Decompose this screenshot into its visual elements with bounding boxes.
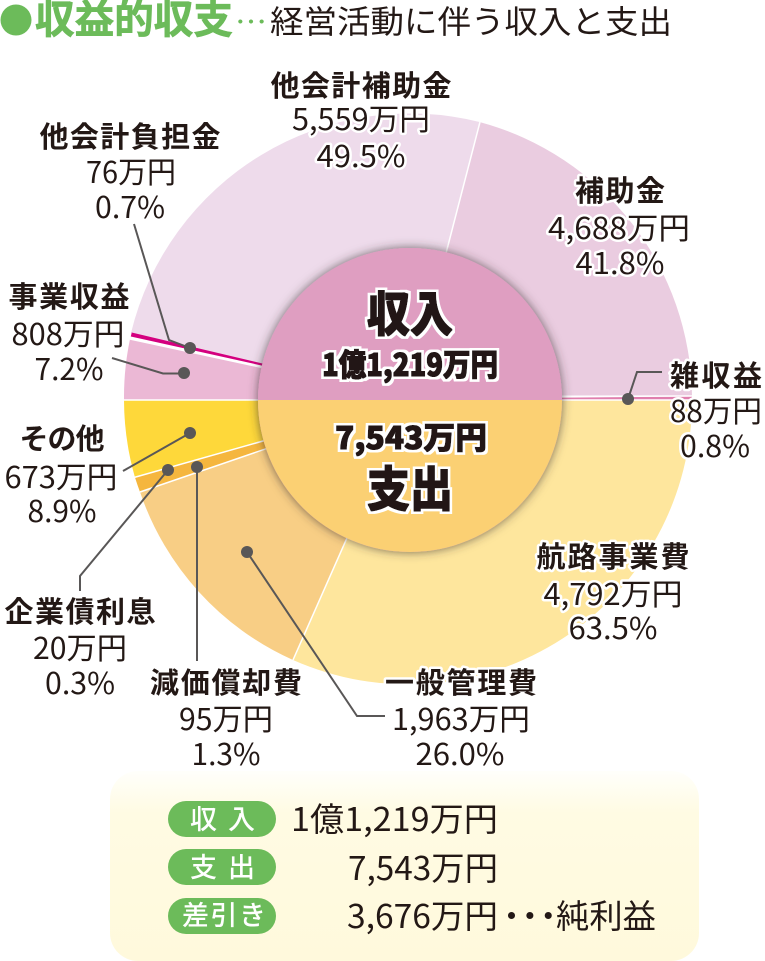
label: 事業収益: 808万円 bbox=[12, 310, 124, 354]
label: 企業債利息 bbox=[4, 589, 156, 703]
label: 一般管理費: 26.0% bbox=[416, 730, 504, 774]
label: 補助金: 41.8% bbox=[576, 239, 664, 283]
label: 減価償却費: 減価償却費 bbox=[150, 660, 302, 702]
summary panel bbox=[110, 771, 699, 961]
label: 減価償却費: 95万円 bbox=[179, 695, 273, 739]
label: 航路事業費: 63.5% bbox=[568, 604, 658, 648]
wedge: 事業収益 bbox=[124, 339, 408, 400]
value: 収入: 1億1,219万円 bbox=[291, 793, 498, 841]
label: 雑収益: 0.8% bbox=[680, 422, 750, 466]
label: 雑収益: 88万円 bbox=[670, 387, 762, 431]
center circle bbox=[258, 248, 562, 552]
row: 支出: 支 bbox=[190, 846, 217, 885]
label: 雑収益 bbox=[670, 353, 762, 466]
label: 他会計補助金: 他会計補助金 bbox=[270, 63, 452, 105]
value: 支出: 7,543万円 bbox=[348, 842, 498, 890]
leader lines bbox=[80, 224, 662, 716]
row: 収入: 入 bbox=[228, 798, 255, 837]
label: 航路事業費 bbox=[536, 534, 690, 648]
label: 企業債利息: 0.3% bbox=[45, 659, 115, 703]
wedge: 他会計補助金 bbox=[131, 113, 480, 400]
label: 一般管理費 bbox=[385, 660, 537, 774]
row: 支出: 出 bbox=[228, 846, 255, 885]
label: 企業債利息: 20万円 bbox=[33, 624, 127, 668]
wedge: 雑収益 bbox=[408, 396, 692, 400]
center expense half bbox=[258, 400, 562, 552]
title bbox=[0, 0, 672, 45]
label: 補助金: 補助金 bbox=[575, 168, 665, 210]
label: その他: 673万円 bbox=[4, 453, 118, 497]
center income total: 収入 bbox=[367, 275, 453, 345]
label: 航路事業費: 4,792万円 bbox=[544, 570, 682, 614]
wedge: 一般管理費 bbox=[140, 400, 408, 660]
label: 減価償却費: 1.3% bbox=[192, 730, 260, 774]
wedge: 企業債利息と減価償却費 bbox=[135, 400, 408, 492]
label: 補助金: 4,688万円 bbox=[548, 204, 690, 248]
center expense total: 7,543万円 bbox=[335, 413, 487, 458]
pill: 差引き bbox=[168, 898, 276, 934]
label: 他会計負担金: 76万円 bbox=[86, 148, 176, 192]
label: 他会計補助金 bbox=[270, 63, 452, 176]
net profit dots: ・・・ bbox=[495, 890, 552, 938]
label: その他: その他 bbox=[20, 416, 104, 458]
donut chart bbox=[124, 113, 692, 684]
center income total bbox=[322, 275, 498, 385]
label: 他会計負担金 bbox=[40, 114, 220, 227]
label: 事業収益: 事業収益 bbox=[8, 274, 130, 316]
center expense total bbox=[335, 413, 487, 520]
wedge: 補助金 bbox=[408, 122, 692, 400]
label: 他会計負担金: 他会計負担金 bbox=[40, 114, 220, 156]
label: 事業収益 bbox=[8, 274, 130, 389]
row: 支出 bbox=[168, 842, 498, 890]
title bullet bbox=[0, 4, 32, 36]
row: 差引き: 差引き bbox=[182, 894, 266, 933]
row: 収入 bbox=[168, 793, 498, 841]
net profit note: 純利益 bbox=[556, 890, 656, 938]
value: 差引き: 3,676万円 bbox=[347, 890, 498, 938]
label: 事業収益: 7.2% bbox=[34, 345, 104, 389]
label: その他 bbox=[4, 416, 118, 531]
label: 企業債利息: 企業債利息 bbox=[4, 589, 156, 631]
center income half bbox=[258, 248, 562, 400]
label: 一般管理費: 一般管理費 bbox=[385, 660, 537, 702]
label: 減価償却費 bbox=[150, 660, 302, 774]
center income total: 1億1,219万円 bbox=[322, 340, 498, 385]
label: 一般管理費: 1,963万円 bbox=[392, 695, 530, 739]
row: 収入: 収 bbox=[190, 798, 217, 837]
wedge: 他会計負担金 bbox=[131, 332, 408, 398]
wedge: その他 bbox=[124, 400, 408, 478]
wedge: 航路事業費 bbox=[293, 400, 692, 684]
label: その他: 8.9% bbox=[28, 487, 96, 531]
row: 差引き bbox=[168, 890, 656, 938]
label: 補助金 bbox=[548, 168, 690, 283]
label: 他会計補助金: 5,559万円 bbox=[292, 95, 430, 139]
label: 他会計補助金: 49.5% bbox=[316, 132, 406, 176]
label: 航路事業費: 航路事業費 bbox=[536, 534, 690, 576]
pill: 収入 bbox=[168, 801, 276, 837]
pill: 支出 bbox=[168, 849, 276, 885]
center expense total: 支出 bbox=[367, 450, 453, 520]
label: 他会計負担金: 0.7% bbox=[95, 183, 165, 227]
label: 雑収益: 雑収益 bbox=[670, 353, 762, 395]
